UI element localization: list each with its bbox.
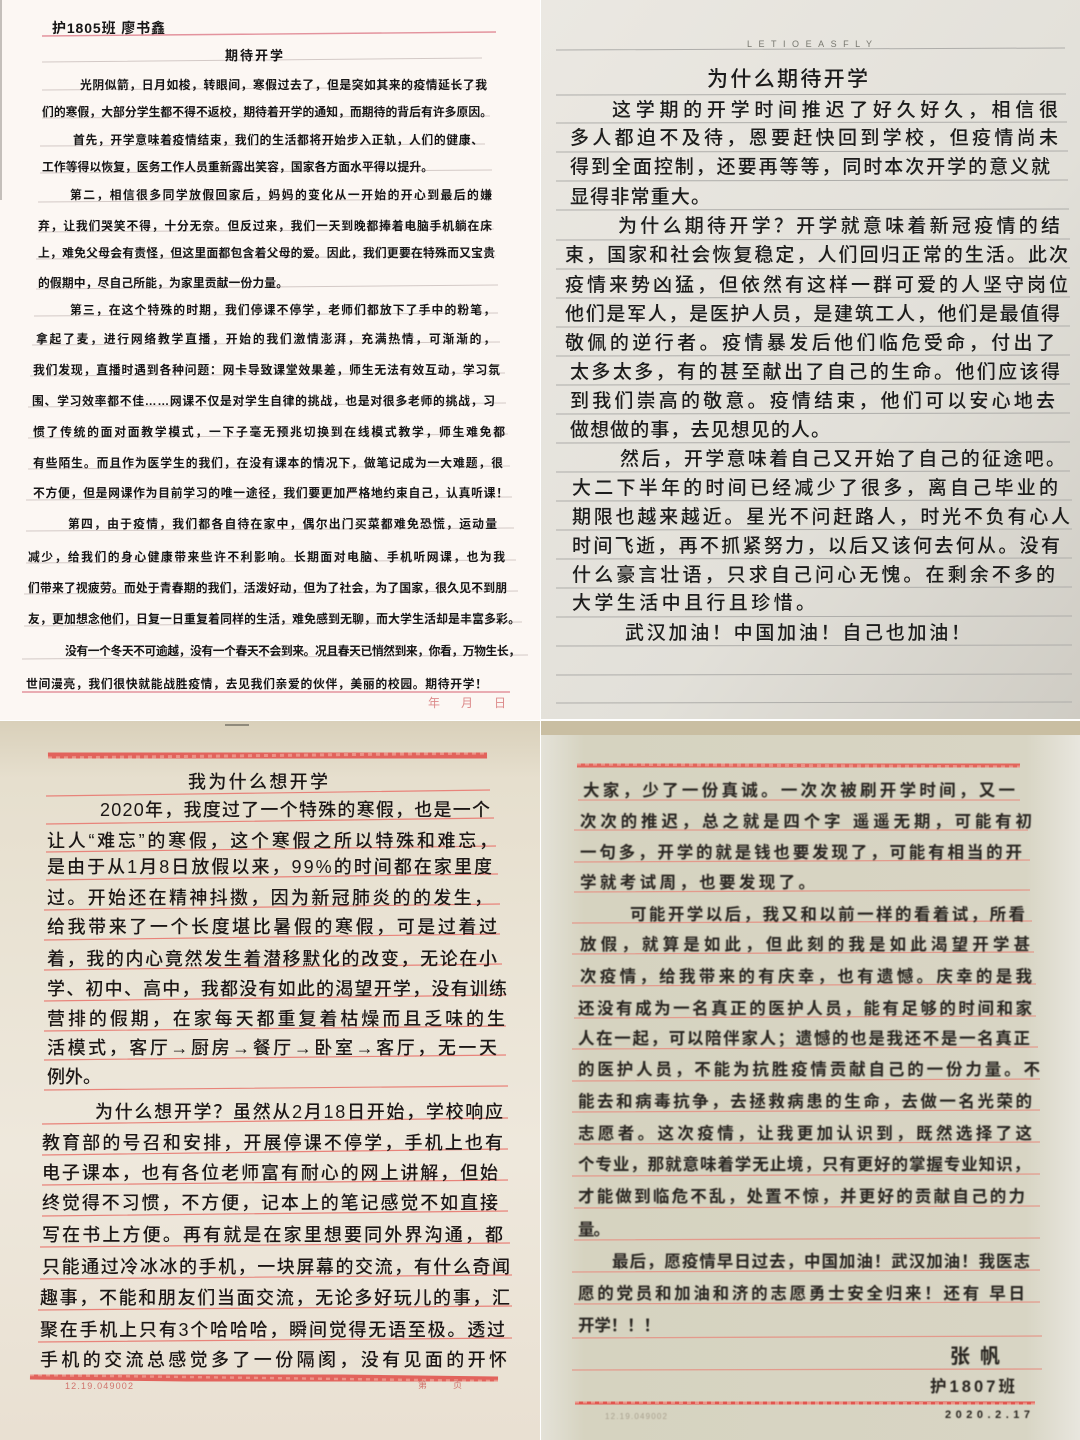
body text: 友，更加想念他们，日复一日重复着同样的生活，难免感到无聊，而大学生活却是丰富多彩。 xyxy=(28,612,520,626)
body text: 我们发现，直播时遇到各种问题：网卡导致课堂效果差，师生无法有效互动，学习氛 xyxy=(33,363,500,377)
body text: 能去和病毒抗争，去拯救病患的生命，去做一名光荣的 xyxy=(578,1091,1032,1111)
body text: 志愿者。这次疫情，让我更加认识到，既然选择了这 xyxy=(578,1123,1032,1143)
body text: 是由于从1月8日放假以来，99%的时间都在家里度 xyxy=(47,857,492,877)
body text: 2020年，我度过了一个特殊的寒假，也是一个 xyxy=(100,800,490,820)
body text: 给我带来了一个长度堪比暑假的寒假，可是过着过 xyxy=(47,917,497,937)
body text: 的医护人员，不能为抗胜疫情贡献自己的一份力量。不 xyxy=(578,1059,1040,1079)
body text: 次疫情，给我带来的有庆幸，也有遗憾。庆幸的是我 xyxy=(580,966,1032,986)
panel: letter 3 我为什么想开学 xyxy=(0,721,540,1440)
body text: 为什么想开学？虽然从2月18日开始，学校响应 xyxy=(95,1101,503,1122)
body text: 可能开学以后，我又和以前一样的看着试，所看 xyxy=(630,904,1025,924)
body text: 人在一起，可以陪伴家人；遗憾的也是我还不是一名真正 xyxy=(578,1028,1030,1048)
body text: 有些陌生。而且作为医学生的我们，在没有课本的情况下，做笔记成为一大难题，很 xyxy=(33,456,503,470)
body text: 大二下半年的时间已经减少了很多，离自己毕业的 xyxy=(572,477,1058,499)
body text: 第二，相信很多同学放假回家后，妈妈的变化从一开始的开心到最后的嫌 xyxy=(70,188,492,202)
body text: 敬佩的逆行者。疫情暴发后他们临危受命，付出了 xyxy=(565,331,1055,354)
body text: 他们是军人，是医护人员，是建筑工人，他们是最值得 xyxy=(565,303,1060,325)
body text: 太多太多，有的甚至献出了自己的生命。他们应该得 xyxy=(570,360,1060,383)
body text: 上，难免父母会有责怪，但这里面都包含着父母的爱。因此，我们更要在特殊而又宝贵 xyxy=(38,246,495,260)
title: 期待开学 xyxy=(225,48,283,63)
date: 2020.2.17 xyxy=(945,1409,1030,1421)
body text: 们带来了视疲劳。而处于青春期的我们，活泼好动，但为了社会，为了国家，很久见不到朋 xyxy=(28,581,507,595)
body text: 惯了传统的面对面教学模式，一下子毫无预兆切换到在线模式教学，师生难免都 xyxy=(33,425,505,439)
body text: 学、初中、高中，我都没有如此的渴望开学，没有训练 xyxy=(47,979,507,999)
title: 为什么期待开学 xyxy=(707,68,868,91)
body text: 没有一个冬天不可逾越，没有一个春天不会到来。况且春天已悄然到来，你看，万物生长， xyxy=(65,644,520,658)
body text: 个专业，那就意味着学无止境，只有更好的掌握专业知识， xyxy=(578,1154,1030,1174)
page mark: 第 页 xyxy=(418,1379,462,1390)
body text: 大学生活中且行且珍惜。 xyxy=(572,592,815,614)
body text: 工作等得以恢复，医务工作人员重新露出笑容，国家各方面水平得以提升。 xyxy=(42,160,433,174)
body text: 显得非常重大。 xyxy=(570,186,710,208)
body text: 手机的交流总感觉多了一份隔阂，没有见面的开怀 xyxy=(40,1350,507,1370)
body text: 只能通过冷冰冰的手机，一块屏幕的交流，有什么奇闻 xyxy=(42,1257,510,1277)
body text: 不方便，但是网课作为目前学习的唯一途径，我们要更加严格地约束自己，认真听课！ xyxy=(33,486,508,500)
date mark: 年 月 日 xyxy=(428,696,506,710)
body text: 拿起了麦，进行网络教学直播，开始的我们激情澎湃，充满热情，可渐渐的， xyxy=(36,332,495,346)
body text: 才能做到临危不乱，处置不惊，并更好的贡献自己的力 xyxy=(578,1186,1025,1206)
body text: 然后，开学意味着自己又开始了自己的征途吧。 xyxy=(620,447,1065,470)
body text: 学就考试周，也要发现了。 xyxy=(580,872,815,892)
body text: 减少，给我们的身心健康带来些许不利影响。长期面对电脑、手机听网课，也为我 xyxy=(28,550,505,564)
decorative top band xyxy=(48,753,487,758)
body text: 聚在手机上只有3个哈哈哈，瞬间觉得无语至极。透过 xyxy=(40,1320,505,1340)
body text: 开学！！！ xyxy=(578,1315,660,1335)
decorative bottom band xyxy=(30,1375,498,1381)
body text: 愿的党员和加油和济的志愿勇士安全归来！还有 早日 xyxy=(578,1283,1025,1303)
body text: 第三，在这个特殊的时期，我们停课不停学，老师们都放下了手中的粉笔， xyxy=(70,303,495,317)
body text: 们的寒假，大部分学生都不得不返校，期待着开学的通知，而期待的背后有许多原因。 xyxy=(42,105,492,119)
body text: 世间漫亮，我们很快就能战胜疫情，去见我们亲爱的伙伴，美丽的校园。期待开学！ xyxy=(26,677,487,691)
body text xyxy=(565,99,1070,644)
body text: 弃，让我们哭笑不得，十分无奈。但反过来，我们一天到晚都捧着电脑手机躺在床 xyxy=(38,219,492,233)
header: class and name: 护1805班 廖书鑫 xyxy=(52,20,165,36)
body text xyxy=(40,800,510,1370)
body text: 次次的推迟，总之就是四个字 遥遥无期，可能有初 xyxy=(580,811,1032,831)
decorative bottom band xyxy=(575,1402,1035,1404)
body text: 电子课本，也有各位老师富有耐心的网上讲解，但始 xyxy=(42,1162,498,1183)
body text: 例外。 xyxy=(47,1067,101,1087)
body text: 趣事，不能和朋友们当面交流，无论多好玩儿的事，汇 xyxy=(40,1288,510,1308)
body text: 让人“难忘”的寒假，这个寒假之所以特殊和难忘， xyxy=(47,831,497,851)
body text: 量。 xyxy=(578,1220,610,1239)
body text: 放假，就算是如此，但此刻的我是如此渴望开学甚 xyxy=(580,934,1030,954)
panel: letter 2 为什么期待开学 xyxy=(541,0,1080,719)
body text: 期限也越来越近。星光不问赶路人，时光不负有心人 xyxy=(572,506,1070,528)
notebook brand: LETIOEASFLY xyxy=(747,39,872,49)
signature: 护1807班 xyxy=(930,1377,1015,1396)
body text: 围、学习效率都不佳……网课不仅是对学生自律的挑战，也是对很多老师的挑战，习 xyxy=(32,394,495,408)
body text: 着，我的内心竟然发生着潜移默化的改变，无论在小 xyxy=(47,948,497,969)
decorative top band xyxy=(577,764,1020,767)
body text: 什么豪言壮语，只求自己问心无愧。在剩余不多的 xyxy=(572,564,1055,586)
body text: 还没有成为一名真正的医护人员，能有足够的时间和家 xyxy=(578,998,1032,1018)
title: 我为什么想开学 xyxy=(188,772,328,792)
body text: 武汉加油！中国加油！自己也加油！ xyxy=(625,622,970,644)
body text: 教育部的号召和安排，开展停课不停学，手机上也有 xyxy=(42,1133,503,1153)
body text: 光阴似箭，日月如梭，转眼间，寒假过去了，但是突如其来的疫情延长了我 xyxy=(80,78,487,92)
page code: 12.19.049002 xyxy=(605,1412,668,1421)
body text: 最后，愿疫情早日过去，中国加油！武汉加油！我医志 xyxy=(612,1251,1030,1271)
panel: letter 4 handwritten continuation xyxy=(541,721,1080,1440)
body text xyxy=(578,780,1040,1335)
panel: letter 1 期待开学 xyxy=(0,0,540,720)
page code: 12.19.049002 xyxy=(65,1381,133,1391)
body text: 第四，由于疫情，我们都各自待在家中，偶尔出门买菜都难免恐慌，运动量 xyxy=(68,517,497,531)
body text: 终觉得不习惯，不方便，记本上的笔记感觉不如直接 xyxy=(42,1193,498,1213)
body text: 到我们崇高的敬意。疫情结束，他们可以安心地去 xyxy=(570,390,1055,412)
signature xyxy=(930,1345,1015,1396)
body text: 写在书上方便。再有就是在家里想要同外界沟通，都 xyxy=(42,1225,503,1245)
body text: 疫情来势凶猛，但依然有这样一群可爱的人坚守岗位 xyxy=(565,273,1068,296)
body text: 做想做的事，去见想见的人。 xyxy=(570,419,830,441)
body text: 活模式，客厅→厨房→餐厅→卧室→客厅，无一天 xyxy=(47,1038,497,1058)
body text: 多人都迫不及待，恩要赶快回到学校，但疫情尚未 xyxy=(570,127,1058,149)
body text: 大家，少了一份真诚。一次次被刷开学时间，又一 xyxy=(583,780,1015,800)
body text: 一句多，开学的就是钱也要发现了，可能有相当的开 xyxy=(580,842,1022,862)
body text: 这学期的开学时间推迟了好久好久，相信很 xyxy=(612,99,1058,121)
body text xyxy=(26,78,520,691)
body text: 为什么期待开学？开学就意味着新冠疫情的结 xyxy=(618,215,1060,237)
body text: 时间飞逝，再不抓紧努力，以后又该何去何从。没有 xyxy=(572,535,1060,557)
body text: 得到全面控制，还要再等等，同时本次开学的意义就 xyxy=(570,156,1050,178)
body text: 营排的假期，在家每天都重复着枯燥而且乏味的生 xyxy=(47,1009,505,1029)
body text: 的假期中，尽自己所能，为家里贡献一份力量。 xyxy=(38,276,288,290)
body text: 首先，开学意味着疫情结束，我们的生活都将开始步入正轨，人们的健康、 xyxy=(73,133,483,147)
body text: 束，国家和社会恢复稳定，人们回归正常的生活。此次 xyxy=(565,244,1068,266)
signature: 张帆 xyxy=(950,1345,1000,1368)
body text: 过。开始还在精神抖擞，因为新冠肺炎的的发生， xyxy=(47,888,492,908)
